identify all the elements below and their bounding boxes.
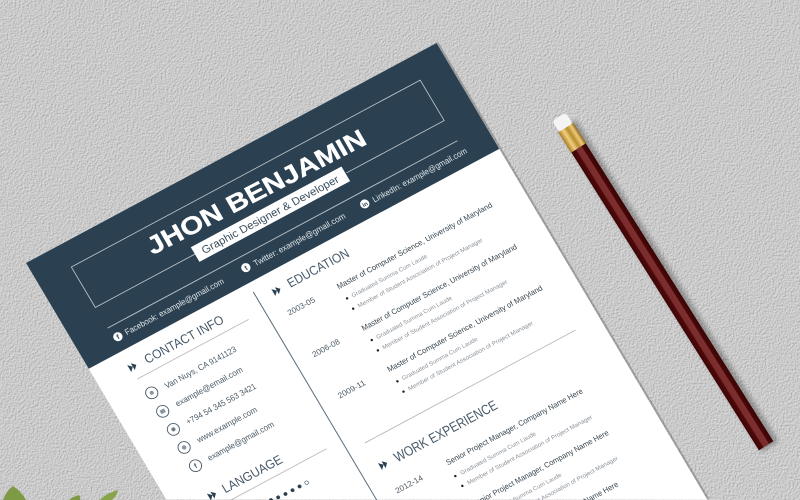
- education entry 3: 2009-11: [336, 378, 368, 400]
- education entry 2: [311, 242, 532, 381]
- contact row: phone: [165, 380, 259, 437]
- contact row: email: example@email.com: [173, 365, 245, 409]
- contact row: website: [176, 404, 259, 455]
- panel: work experience: [376, 358, 636, 500]
- contact row: phone: +794 54 345 563 3421: [184, 381, 258, 427]
- contact row: gmail: f: [193, 463, 199, 470]
- heading: language: [205, 452, 285, 500]
- education entry 3: [336, 284, 558, 423]
- heading: contact info: CONTACT INFO: [141, 312, 226, 367]
- pencil: [551, 110, 779, 453]
- contact: twitter: Twitter: example@gmail.com: [251, 211, 347, 268]
- work entry 1: Graduated Summa Cum Laude: [460, 431, 538, 477]
- resume sheet: [26, 42, 709, 500]
- heading: contact info: [125, 312, 226, 375]
- leaves: [3, 486, 118, 500]
- work entry 1: 2012-14: [394, 473, 425, 495]
- contact row: email: [154, 364, 245, 419]
- contact: facebook: Facebook: example@gmail.com: [123, 276, 226, 337]
- contact row: gmail: example@gmail.com: [206, 419, 276, 463]
- education entry 2: Master of Computer Science, University of Maryland: [360, 242, 519, 333]
- education entry 1: Member of Student Association of Project Manager: [357, 238, 484, 310]
- contact row: address: Van Nuys, CA 9141123: [163, 344, 238, 390]
- subtitle box: Graphic Designer & Developer: [200, 174, 342, 257]
- paper shadow: [437, 42, 709, 500]
- contact: linkedin: LinkedIn: example@gmail.com: [370, 146, 469, 204]
- work entry 1: Senior Project Manager, Company Name Here: [444, 387, 585, 467]
- education entry 1: [286, 201, 507, 340]
- name: JHON BENJAMIN: [142, 124, 371, 260]
- paper: [26, 43, 707, 500]
- language rating dots: [268, 479, 309, 500]
- panel: contact info: [125, 301, 338, 500]
- work entry 1: Member of Student Association of Project Manager: [467, 415, 594, 487]
- education entry 3: Graduated Summa Cum Laude: [401, 337, 480, 382]
- education entry 3: Member of Student Association of Project Manager: [407, 321, 535, 392]
- education entry 1: Master of Computer Science, University of Maryland: [335, 201, 494, 291]
- contact: twitter: t: [244, 265, 250, 272]
- education entry 3: Master of Computer Science, University of Maryland: [386, 284, 544, 374]
- education entry 1: Graduated Summa Cum Laude: [351, 254, 429, 299]
- contact row: gmail: [187, 419, 277, 474]
- header divider: [108, 141, 457, 328]
- work entry 1: [393, 387, 598, 500]
- contact row: address: [143, 343, 239, 401]
- heading: education: [269, 246, 352, 299]
- heading: work experience: [376, 397, 500, 473]
- heading: education: EDUCATION: [284, 246, 352, 291]
- education entry 2: Member of Student Association of Project Manager: [382, 280, 509, 351]
- contact row: website: www.example.com: [194, 404, 259, 445]
- header frame: [71, 80, 444, 307]
- column divider: [253, 292, 377, 500]
- education entry 1: 2003-05: [286, 295, 317, 317]
- education entry 2: 2006-08: [311, 337, 342, 359]
- heading: work experience: WORK EXPERIENCE: [391, 397, 500, 465]
- header band: [26, 43, 499, 369]
- heading: language: LANGUAGE: [219, 452, 285, 496]
- contact: facebook: f: [116, 334, 122, 341]
- education entry 2: Graduated Summa Cum Laude: [376, 295, 454, 341]
- panel: education: [269, 175, 558, 424]
- contact: linkedin: in: [362, 201, 370, 209]
